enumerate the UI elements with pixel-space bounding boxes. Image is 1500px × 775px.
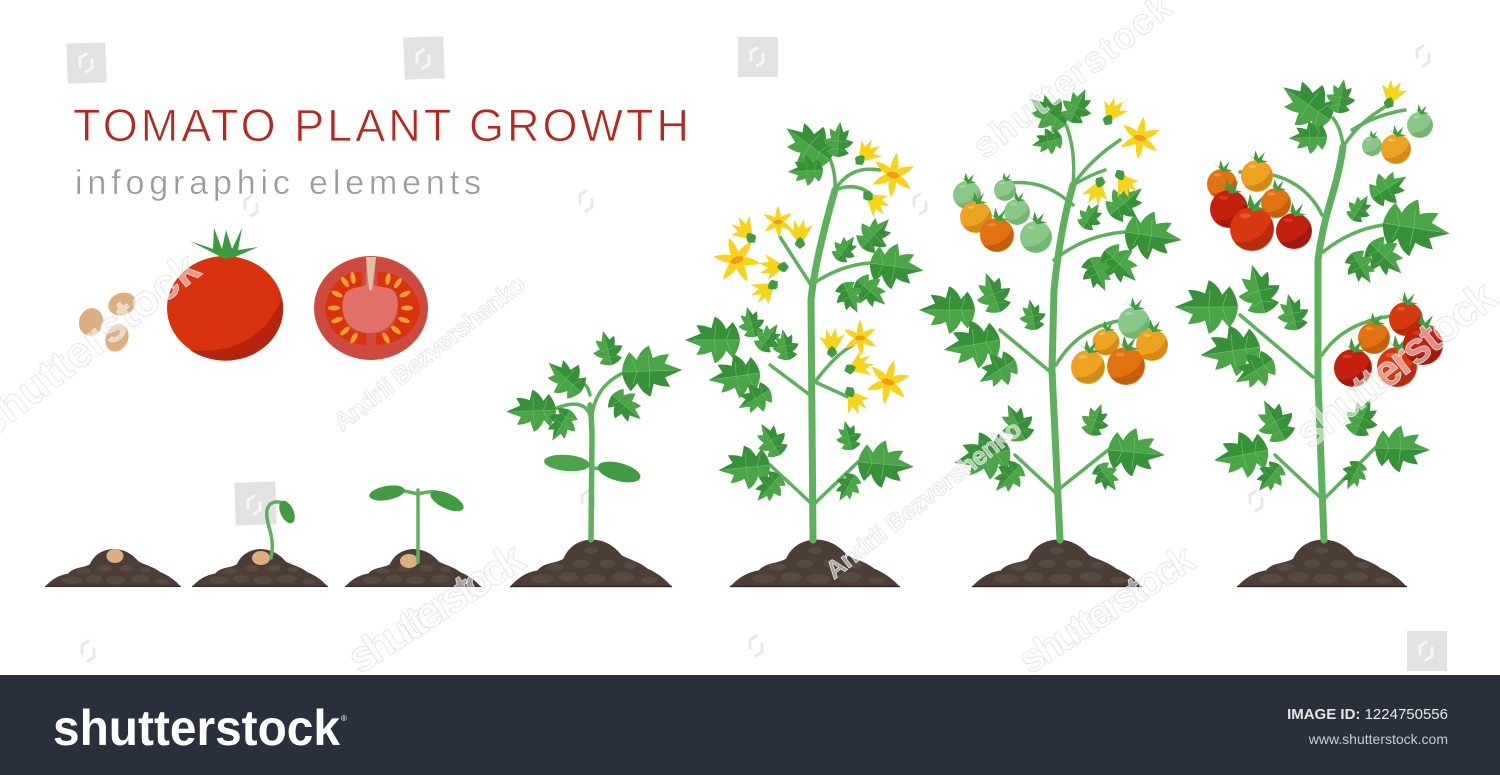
image id: IMAGE ID: 1224750556	[1287, 706, 1448, 723]
stage 2: sprout	[192, 498, 328, 587]
leaves	[919, 83, 1185, 501]
leaves	[1175, 67, 1454, 500]
watermark text: shutterstock	[1286, 271, 1500, 458]
watermark squares	[66, 36, 1447, 671]
flowers	[1080, 93, 1164, 209]
stage 6: unripe fruit plant	[919, 83, 1185, 587]
icon: whole tomato	[167, 228, 283, 361]
icon: tomato seeds	[76, 289, 139, 355]
footer logo: shutterstock	[53, 700, 340, 756]
stem	[811, 190, 835, 540]
stage 7: ripe fruit plant	[1175, 67, 1454, 587]
flower	[1375, 76, 1409, 113]
website: www.shutterstock.com	[1308, 731, 1448, 747]
watermark text: shutterstock	[339, 533, 534, 683]
stem	[1052, 185, 1073, 540]
footer bar	[0, 675, 1500, 775]
stage 4: young plant	[505, 327, 683, 587]
subtitle: infographic elements	[75, 164, 481, 202]
stem	[1318, 147, 1343, 540]
watermark text: Andrii Bezvershenko	[820, 415, 1027, 585]
registered mark: ®	[341, 714, 347, 723]
tomatoes	[1207, 104, 1443, 387]
stage 1: seed in soil	[45, 549, 181, 587]
branches	[770, 155, 880, 505]
branches	[1240, 103, 1405, 500]
branches	[1000, 125, 1125, 495]
leaves	[685, 110, 927, 510]
title: TOMATO PLANT GROWTH	[73, 100, 689, 151]
watermark text: Andrii Bezvershenko	[328, 270, 531, 437]
stage 3: seedling	[345, 483, 481, 587]
watermark text: shutterstock	[1011, 536, 1203, 683]
icon: tomato cross-section	[314, 256, 428, 360]
stage 5: flowering plant	[685, 110, 927, 587]
flowers	[707, 134, 918, 419]
watermark small icons	[82, 46, 1429, 661]
tomatoes	[953, 172, 1168, 385]
